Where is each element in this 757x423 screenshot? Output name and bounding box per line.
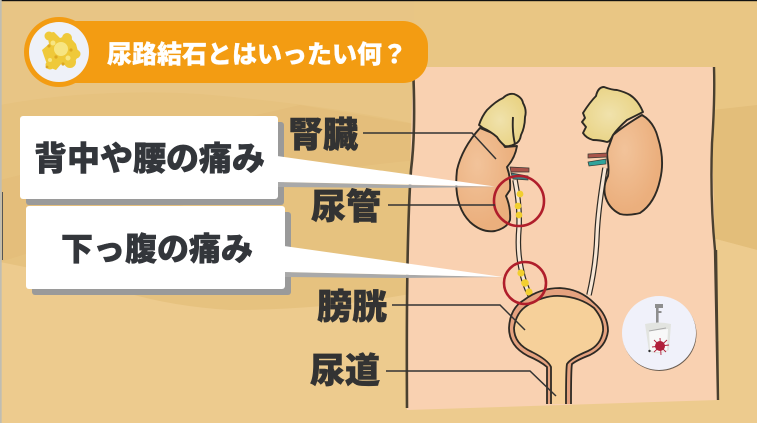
- ureters: [515, 168, 605, 297]
- right kidney: [582, 87, 662, 215]
- leader lines: [363, 133, 556, 396]
- callout: lower abdomen pain: 下っ腹の痛み: [61, 231, 253, 267]
- kidney stones: [515, 191, 533, 296]
- red circle: upper ureter: [494, 176, 544, 226]
- icon: urinary stone: [42, 32, 80, 70]
- right adrenal gland: [582, 87, 643, 142]
- title banner: [24, 17, 428, 87]
- label: urethra: 尿道: [310, 352, 380, 391]
- left adrenal gland: [479, 94, 526, 146]
- title text: 尿路結石とはいったい何？: [107, 41, 407, 69]
- callout: lower abdomen pain: [26, 206, 503, 295]
- red circle: lower ureter: [504, 262, 546, 304]
- callout: back and waist pain: [20, 116, 495, 205]
- bladder: [509, 288, 608, 404]
- left kidney: [456, 94, 526, 231]
- label: kidney: 腎臓: [288, 116, 358, 155]
- label: ureter: 尿管: [311, 188, 381, 227]
- callout: back and waist pain: 背中や腰の痛み: [34, 140, 265, 177]
- renal vessels: [510, 153, 607, 180]
- icon: urinal with blood: [622, 296, 696, 371]
- panel: body torso: [407, 67, 718, 410]
- label: bladder: 膀胱: [317, 288, 387, 327]
